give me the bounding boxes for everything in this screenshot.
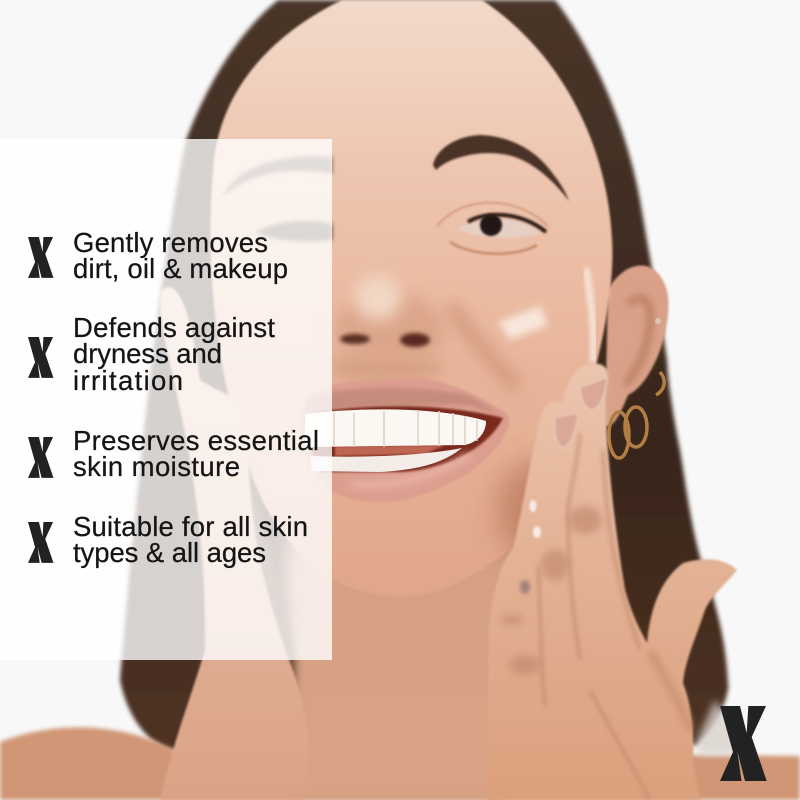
neck [285,500,525,800]
text: defends against: Defends against [73,312,275,343]
lips [300,377,509,502]
icon: X mark [28,237,53,278]
foam drops on finger [530,500,541,538]
benefit 1 [28,227,288,284]
text: suitable for all [73,511,308,568]
lower teeth [310,448,462,472]
translucent text panel [0,139,332,660]
upper lip area shading [325,354,445,382]
little finger tip shade [520,580,530,594]
text: suitable for all: Suitable for all skin [73,511,308,542]
tooth gaps [334,410,477,447]
text: gently removes: dirt, oil & makeup [73,253,288,284]
upper lip shade [305,388,503,416]
hair shadow beside left jaw [245,460,295,700]
text: preserves moisture: Preserves essential [73,425,319,456]
eye right [437,203,548,254]
thumb shade [650,650,690,730]
benefit 3 [28,425,319,482]
text: defends against: dryness and [73,338,222,369]
text: preserves moisture: skin moisture [73,451,240,482]
icon: brand X logo [720,706,767,781]
jaw shading [497,460,573,560]
shoulders and chest [0,727,800,800]
benefit 4 [28,511,308,568]
text: preserves moisture [73,425,319,482]
benefit 2 [28,312,275,396]
nails [555,377,607,448]
lip gloss [350,454,470,485]
mouth interior [305,406,503,472]
right hand [487,363,737,800]
icon: X mark [28,337,53,378]
left hand [160,287,309,800]
left eye [255,221,332,242]
knuckle wrinkles [500,506,602,675]
text: gently removes: Gently removes [73,227,268,258]
text: suitable for all: types & all ages [73,537,266,568]
wispy hair tips [695,700,740,755]
mouth [300,377,509,502]
foam streak [586,268,594,362]
finger separations [538,433,650,800]
icon: X mark [28,522,53,563]
face [210,0,612,597]
cheek fold shading [450,305,518,388]
text: defends against: irritation [73,365,183,396]
icon: X mark [28,437,53,478]
ear [605,265,668,426]
hair [120,0,728,750]
upper teeth [305,409,486,447]
eyebrow right [433,135,569,201]
text: gently removes [73,227,288,284]
tongue glow [335,445,445,456]
left brow [222,156,332,197]
foam on cheek [498,306,548,340]
earrings [609,318,664,458]
nose [334,276,446,360]
hand silhouette [487,363,737,800]
text: defends against [73,312,275,396]
